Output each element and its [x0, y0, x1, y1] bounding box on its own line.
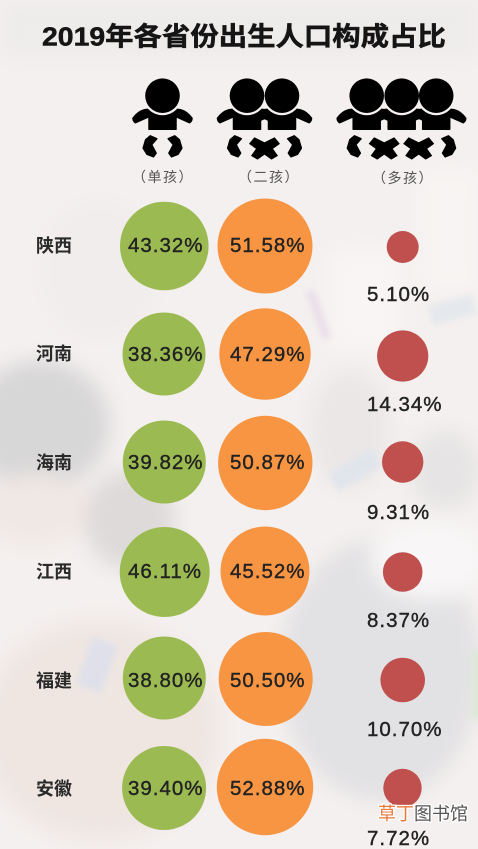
province name: 海南 [36, 453, 72, 473]
title: 2019年各省份出生人口构成占比 [42, 21, 446, 51]
two children value: 47.29% [230, 343, 306, 366]
two children value: 50.50% [230, 669, 306, 692]
row: 海南 [36, 416, 430, 524]
single child value: 39.82% [128, 451, 204, 474]
two children value: 50.87% [230, 451, 306, 474]
single child bubble [123, 636, 206, 720]
single child value: 38.80% [128, 669, 204, 692]
icon: three babies [337, 76, 466, 159]
caption: two children: （二孩） [238, 169, 300, 185]
province name: 江西 [36, 562, 72, 582]
province name: 河南 [36, 344, 72, 364]
icon: single baby [133, 76, 192, 157]
row: 江西 [36, 526, 430, 632]
multiple children bubble [380, 658, 425, 702]
row: 安徽 [36, 739, 430, 849]
caption: single child: （单孩） [132, 169, 194, 185]
single child bubble [120, 527, 210, 617]
multiple children value: 14.34% [367, 393, 443, 416]
row: 陕西 [36, 198, 430, 306]
single child value: 43.32% [128, 234, 204, 257]
two children value: 45.52% [230, 560, 306, 583]
province name: 安徽 [36, 779, 72, 799]
multiple children bubble [382, 441, 423, 483]
province name: 福建 [36, 671, 72, 691]
multiple children value: 5.10% [367, 283, 430, 306]
province name: 陕西 [36, 236, 72, 256]
single child bubble [122, 746, 206, 830]
row: 福建 [36, 632, 443, 741]
two children value: 52.88% [230, 777, 306, 800]
single child value: 39.40% [128, 777, 204, 800]
two children bubble [220, 526, 310, 616]
two children bubble [217, 739, 313, 835]
watermark: 草丁图书馆 [378, 804, 468, 824]
two children bubble [218, 198, 312, 294]
single child bubble [122, 312, 206, 396]
multiple children value: 10.70% [367, 718, 443, 741]
two children value: 51.58% [230, 234, 306, 257]
single child value: 46.11% [128, 560, 202, 583]
multiple children bubble [387, 231, 419, 263]
two children bubble [218, 416, 312, 510]
icon: two babies [218, 76, 312, 159]
multiple children bubble [377, 330, 428, 382]
single child bubble [123, 420, 206, 504]
multiple children value: 8.37% [367, 609, 430, 632]
two children bubble [219, 308, 311, 400]
caption: three or more children: （多孩） [372, 170, 434, 186]
multiple children bubble [383, 552, 423, 592]
multiple children value: 9.31% [367, 501, 430, 524]
multiple children bubble [383, 769, 422, 807]
single child bubble [120, 202, 209, 290]
single child value: 38.36% [128, 343, 204, 366]
two children bubble [219, 632, 313, 726]
row: 河南 [36, 308, 443, 416]
